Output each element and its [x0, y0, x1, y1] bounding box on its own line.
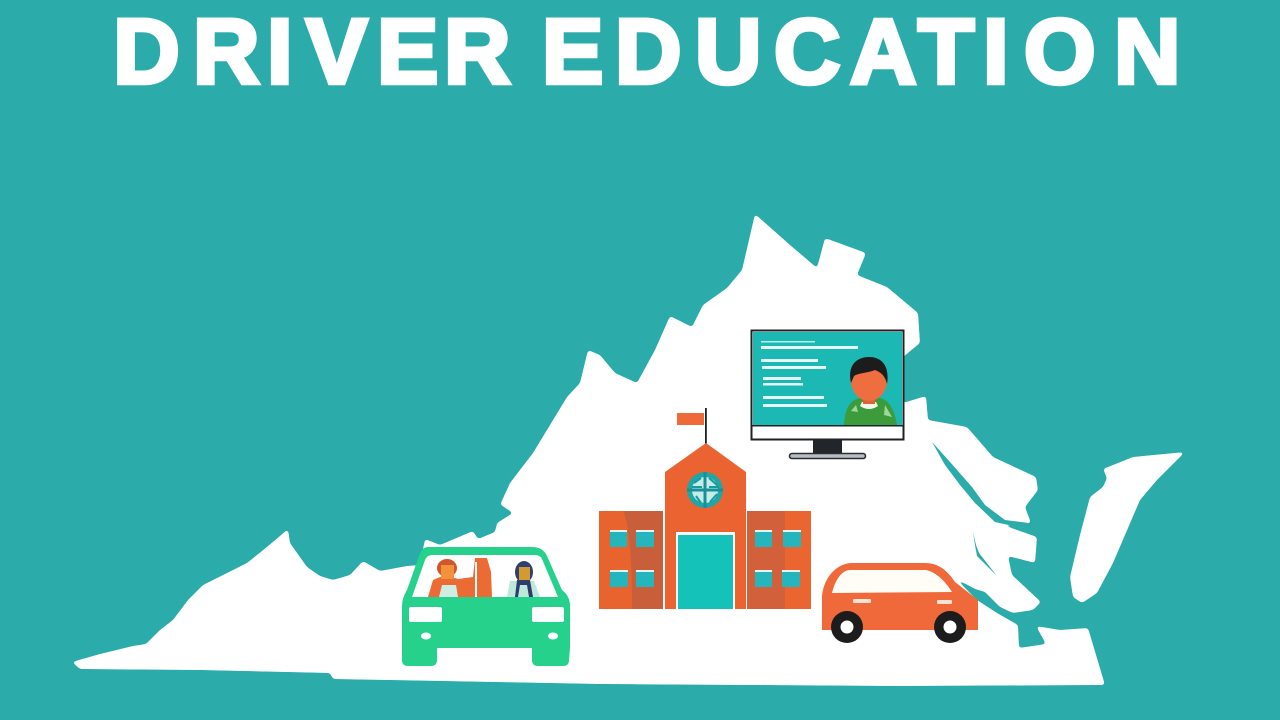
monitor: stand — [813, 439, 842, 453]
school: right wing — [747, 511, 811, 609]
title: DRIVER EDUCATION — [113, 1, 1180, 103]
monitor: base — [790, 454, 866, 458]
monitor: on-screen text lines — [761, 341, 858, 407]
school: left wing shading — [623, 511, 663, 609]
orange car: door handles — [853, 599, 952, 604]
school: window highlights — [610, 530, 801, 572]
orange car: body — [822, 563, 978, 630]
school: windows — [610, 530, 801, 587]
map: river inlet north — [932, 442, 1029, 526]
green car: windshield — [412, 555, 558, 597]
school: left wing — [599, 511, 663, 609]
school: central tower — [665, 443, 746, 609]
icon: school building — [599, 408, 811, 609]
green car: right passenger — [507, 561, 540, 597]
green car: headlights — [409, 607, 564, 622]
map: river inlet south — [973, 532, 997, 576]
school: flag — [677, 408, 707, 444]
icon: orange car side view — [822, 563, 978, 643]
school: door — [676, 532, 735, 609]
map: eastern shore peninsula — [1070, 452, 1185, 603]
orange car: windows — [832, 570, 952, 593]
monitor: student portrait — [844, 357, 897, 425]
map: Virginia state silhouette — [72, 214, 1185, 686]
green car: left passenger — [428, 558, 492, 597]
icon: computer monitor with online course — [752, 330, 904, 458]
orange car: front wheel — [831, 611, 863, 643]
school: right wing highlight — [785, 511, 811, 609]
green car: body — [402, 547, 570, 666]
map: mainland — [72, 214, 1105, 686]
school: round window — [687, 472, 723, 508]
icon: green car front view with driver and student — [402, 547, 570, 666]
orange car: rear wheel — [934, 611, 966, 643]
green car: fog lights — [421, 632, 558, 640]
